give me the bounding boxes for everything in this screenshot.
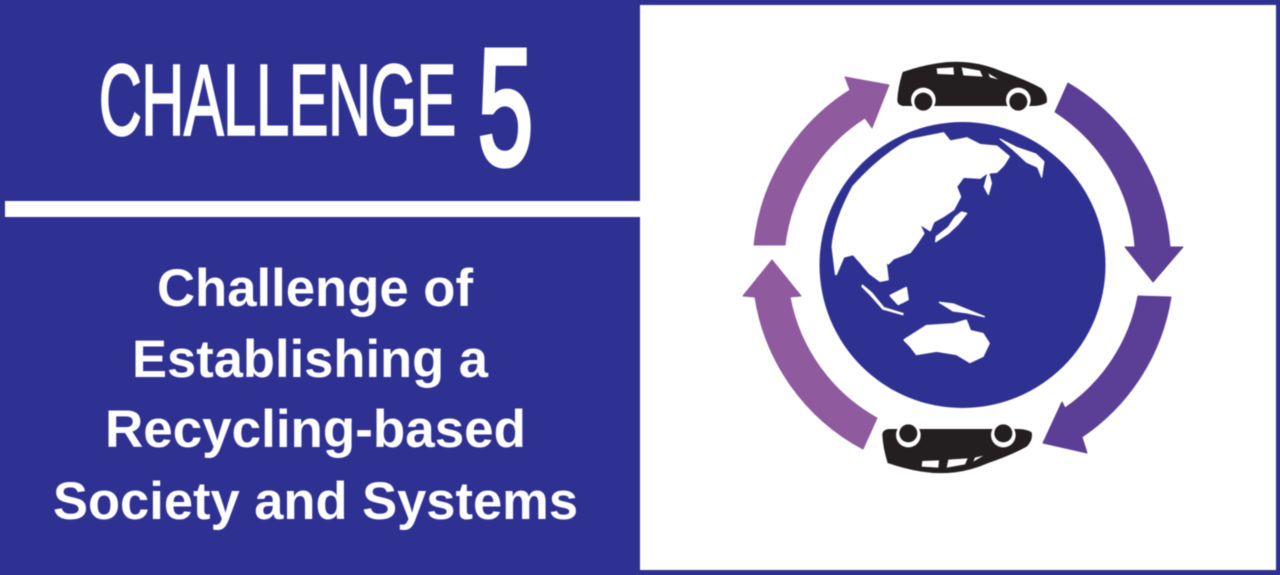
white divider bar [5, 201, 641, 217]
Sumatra and Java [862, 285, 903, 315]
heading: CHALLENGE 5 [99, 15, 533, 199]
Borneo [891, 288, 908, 304]
subtitle text block: Society and Systems [53, 472, 578, 531]
Japan [936, 212, 967, 242]
arrow: bottom left [743, 260, 877, 449]
Asia [833, 133, 1009, 281]
icon: car, top [897, 62, 1047, 113]
icon: car, bottom (upside down) [882, 422, 1032, 473]
arrow: bottom right [1043, 296, 1171, 453]
heading: CHALLENGE 5: CHALLENGE [99, 44, 456, 156]
panel: white illustration panel [640, 5, 1276, 570]
heading: CHALLENGE 5: 5 [478, 15, 533, 199]
arrow: top left [754, 77, 889, 245]
icon: recycling loop around globe [743, 77, 1183, 453]
subtitle text block: Challenge of [157, 259, 473, 318]
continents [833, 133, 1044, 362]
arrow: top right [1055, 83, 1183, 282]
subtitle text block: Establishing a [132, 330, 489, 389]
Sakhalin [984, 172, 991, 194]
subtitle text block: Recycling-based [105, 400, 526, 459]
Australia [905, 321, 989, 362]
New Guinea [939, 302, 984, 317]
globe disc [820, 122, 1106, 408]
subtitle text block [53, 259, 578, 531]
icon: globe [820, 122, 1106, 408]
Kamchatka [1000, 139, 1044, 177]
